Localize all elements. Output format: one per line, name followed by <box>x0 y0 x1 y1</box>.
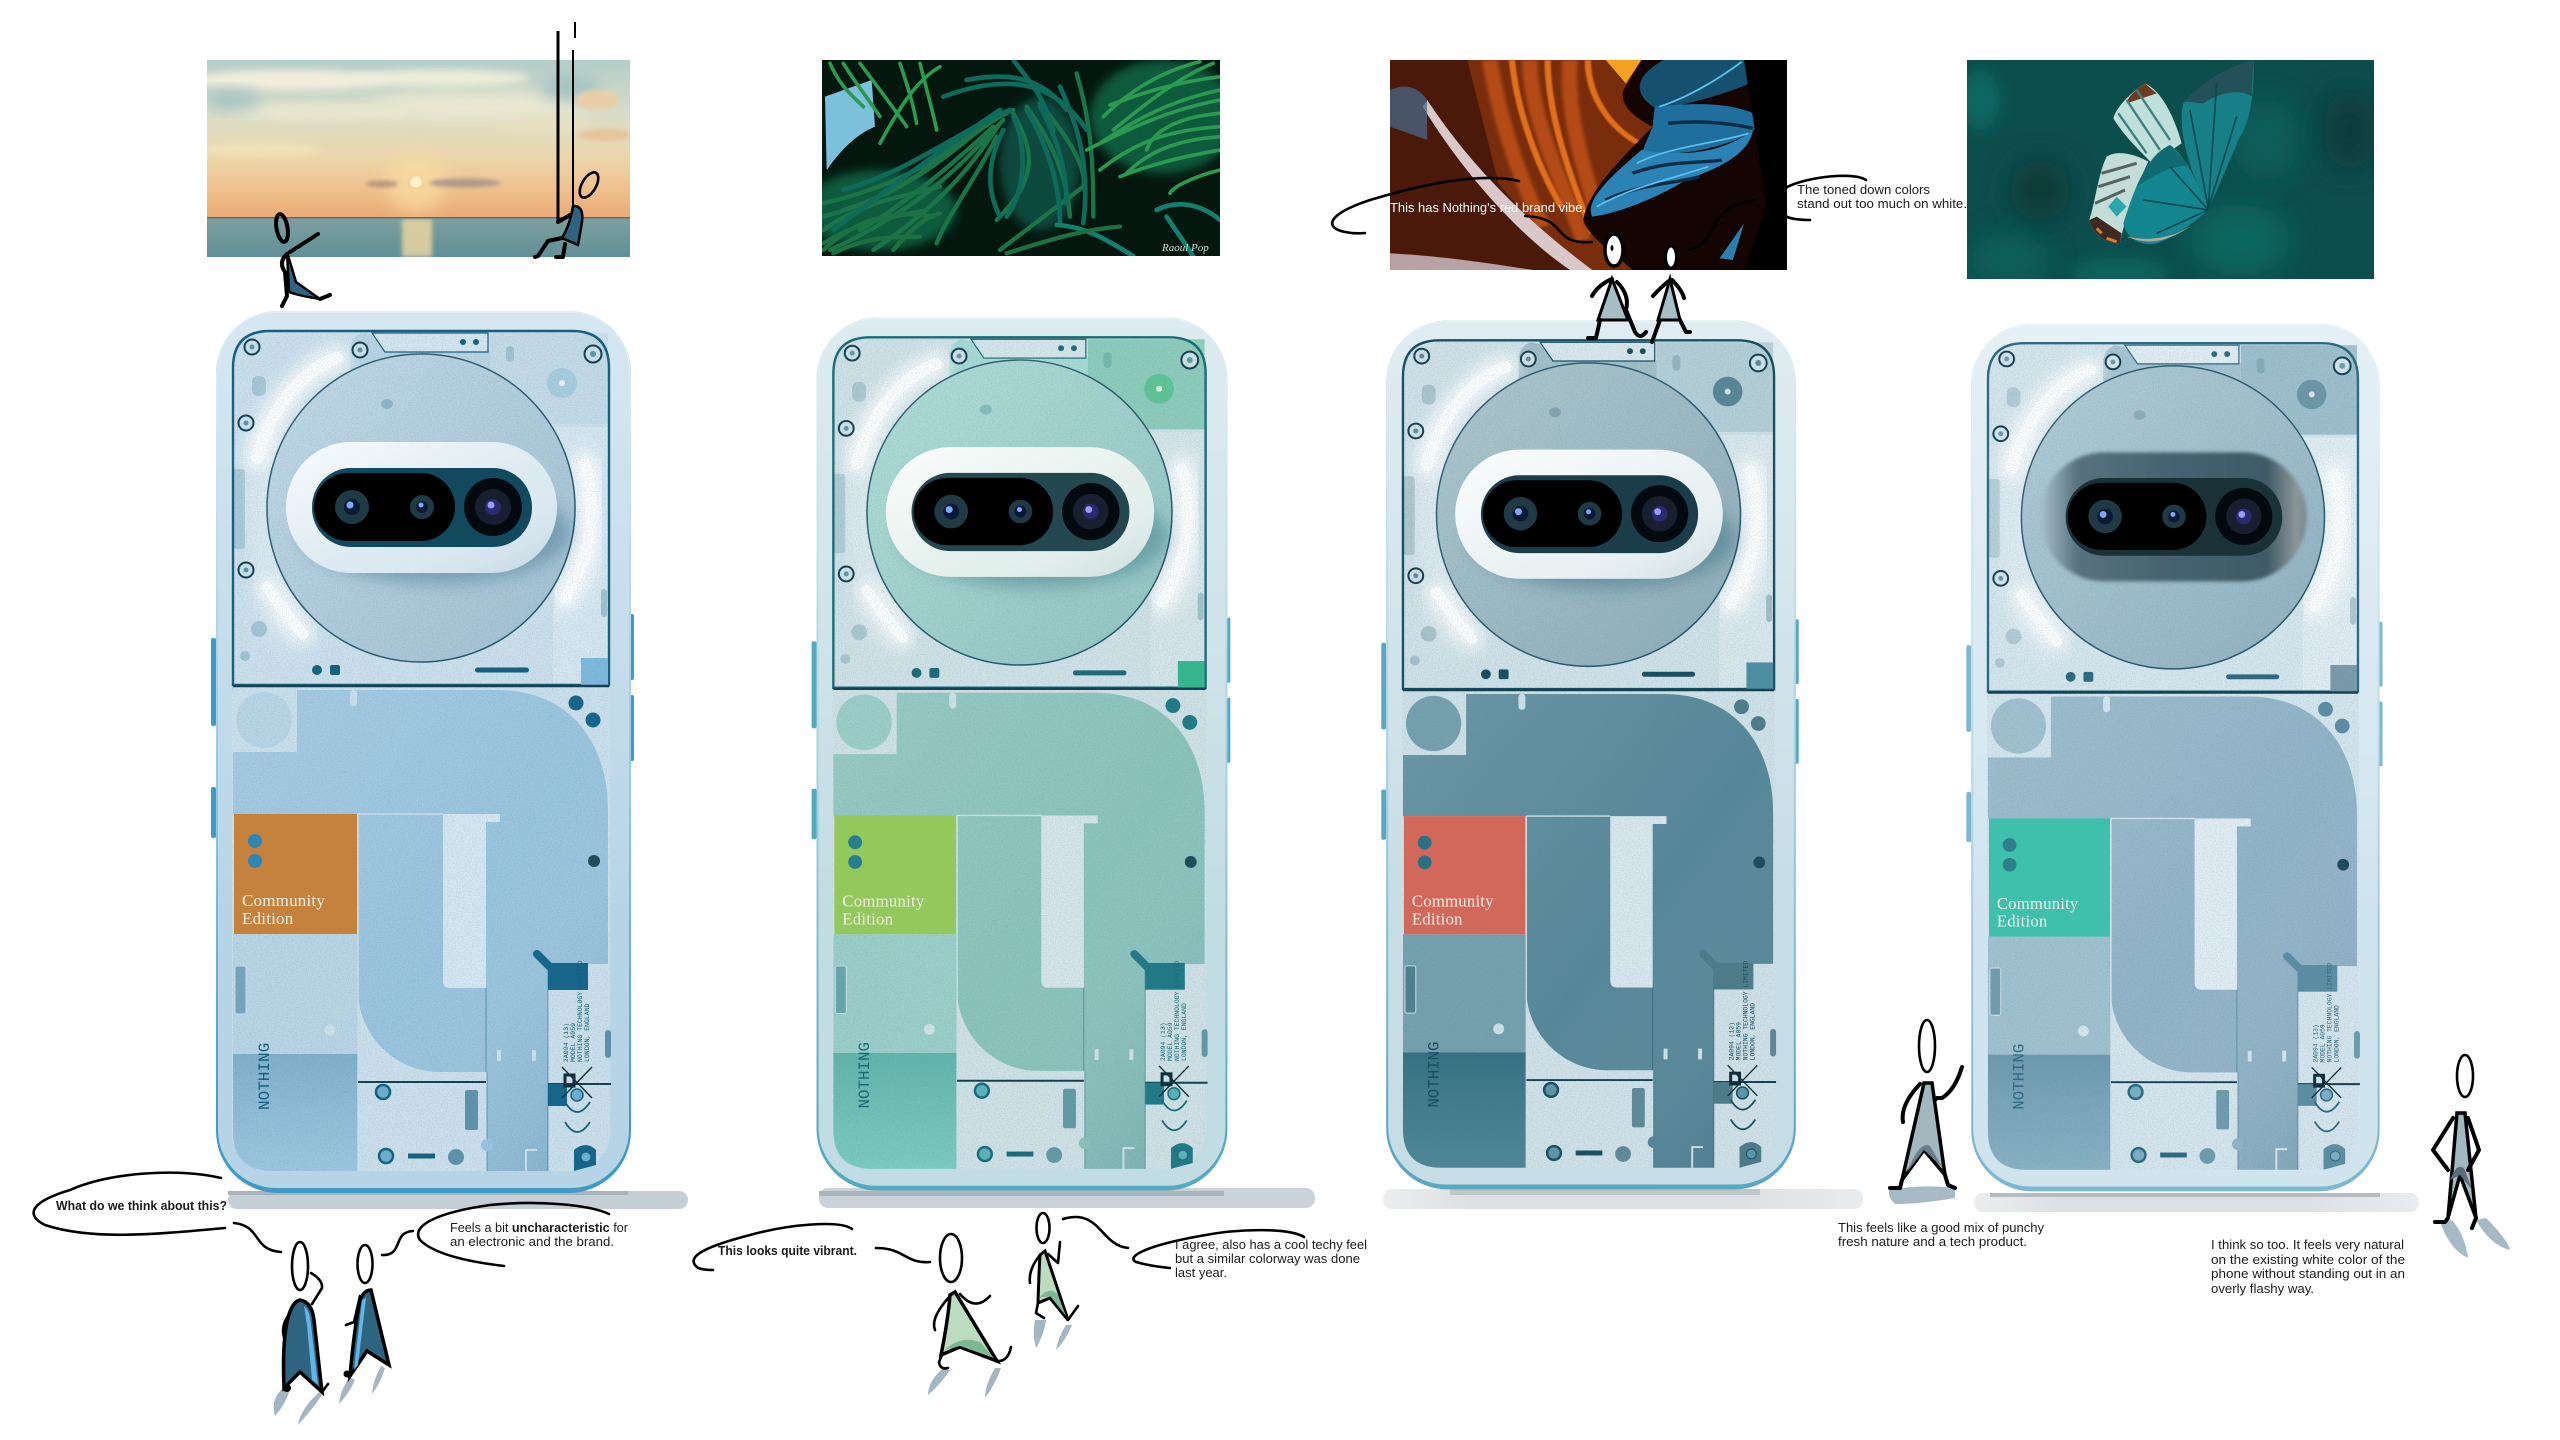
figure: waving walker <box>1889 1020 1962 1204</box>
speech bubble: cool techy: but a similar colorway was done <box>1175 1252 1360 1266</box>
speech bubble: red brand vibe: This has Nothing's red brand vibe. <box>1390 201 1586 215</box>
regulatory text: LONDON, ENGLAND <box>1749 1003 1756 1060</box>
brand wordmark: NOTHING <box>856 1042 874 1109</box>
community edition patch <box>1989 818 2110 937</box>
caption: very natural <box>2211 1238 2405 1296</box>
speech bubble: what do we think <box>34 1173 281 1252</box>
photo: red canyon <box>1390 60 1787 270</box>
community edition patch <box>834 815 956 934</box>
phone 2: green patch <box>812 317 1230 1191</box>
community edition patch: Edition <box>842 909 894 928</box>
brand wordmark: NOTHING <box>256 1043 274 1110</box>
figure: left pair, shorter <box>339 1245 389 1404</box>
regulatory text: NOTHING TECHNOLOGY LIMITED <box>2326 963 2333 1063</box>
figure: green walker, large <box>928 1234 1011 1398</box>
speech bubble: uncharacteristic: Feels a bit uncharacteristic for <box>450 1221 628 1235</box>
community edition patch: Edition <box>242 909 294 928</box>
regulatory text: MODEL A059 <box>1167 1022 1174 1061</box>
regulatory text: LONDON, ENGLAND <box>1181 1003 1188 1061</box>
community edition patch: Community <box>1412 892 1494 911</box>
speech bubble: uncharacteristic: an electronic and the brand. <box>450 1235 614 1249</box>
photo: green foliage: Raoul Pop <box>1161 242 1209 254</box>
floor shadow: phone 1 <box>228 1191 688 1209</box>
caption: punchy fresh nature <box>1838 1221 2045 1249</box>
speech bubble: toned down colors: stand out too much on white. <box>1797 197 1967 211</box>
speech bubble: uncharacteristic <box>382 1203 628 1266</box>
brand wordmark: NOTHING <box>1425 1041 1444 1108</box>
community edition patch: Edition <box>1997 912 2048 931</box>
regulatory text: 2A094 (13) <box>1160 1022 1167 1061</box>
regulatory text: 2A094 (13) <box>2313 1024 2320 1063</box>
figure: green walker, small <box>1030 1213 1078 1350</box>
phone 4: teal patch <box>1966 324 2383 1191</box>
caption: very natural: on the existing white color of the <box>2211 1253 2405 1267</box>
speech bubble: cool techy: I agree, also has a cool techy feel <box>1175 1238 1367 1252</box>
community edition patch: Edition <box>1412 909 1463 928</box>
caption: punchy fresh nature: fresh nature and a tech product. <box>1838 1235 2027 1249</box>
speech bubble: what do we think: What do we think about this? <box>56 1199 227 1213</box>
caption: very natural: phone without standing out in an <box>2211 1267 2405 1281</box>
camera module <box>286 442 571 584</box>
speech bubble: cool techy: last year. <box>1175 1266 1227 1280</box>
camera module <box>1455 450 1737 590</box>
camera module <box>886 447 1168 588</box>
regulatory text: LONDON, ENGLAND <box>2333 1005 2340 1063</box>
regulatory text: MODEL A059 <box>1736 1022 1743 1060</box>
photo: teal butterfly <box>1960 60 2376 286</box>
figure: left pair, taller <box>274 1242 328 1425</box>
figure: on rope swing <box>535 22 602 257</box>
caption: very natural: I think so too. It feels very natural <box>2211 1238 2404 1252</box>
floor shadow: phone 2 <box>819 1188 1315 1208</box>
community edition patch: Community <box>1997 894 2079 913</box>
regulatory text: NOTHING TECHNOLOGY LIMITED <box>577 960 584 1062</box>
caption: very natural: overly flashy way. <box>2211 1282 2314 1296</box>
regulatory text: MODEL A059 <box>2319 1024 2326 1063</box>
photo: green foliage <box>803 57 1237 257</box>
speech bubble: vibrant: This looks quite vibrant. <box>718 1244 857 1258</box>
figure: seated on phone, right <box>1652 246 1690 342</box>
figure: pointing at sunset <box>274 213 330 306</box>
regulatory text: NOTHING TECHNOLOGY LIMITED <box>1174 961 1181 1061</box>
speech bubble: cool techy <box>1063 1217 1367 1280</box>
regulatory text: MODEL A059 <box>570 1023 577 1062</box>
regulatory text: LONDON, ENGLAND <box>584 1003 591 1062</box>
speech bubble: toned down colors: The toned down colors <box>1797 183 1930 197</box>
speech bubble: toned down colors <box>1688 176 1967 250</box>
floor shadow: phone 3 <box>1383 1189 1863 1209</box>
figure: seated on phone, left <box>1588 234 1646 338</box>
community edition patch: Community <box>242 891 325 910</box>
community edition patch <box>234 814 357 934</box>
figure: hands on hips <box>2433 1055 2510 1258</box>
speech bubble: red brand vibe <box>1332 178 1592 242</box>
regulatory text: NOTHING TECHNOLOGY LIMITED <box>1742 961 1749 1060</box>
phone 3: red patch <box>1381 321 1799 1189</box>
regulatory text: 2A094 (13) <box>563 1023 570 1062</box>
caption: punchy fresh nature: This feels like a good mix of punchy <box>1838 1221 2045 1235</box>
brand wordmark: NOTHING <box>2010 1044 2028 1110</box>
regulatory text: 2A094 (13) <box>1729 1022 1736 1060</box>
camera module <box>2040 452 2307 581</box>
speech bubble: vibrant <box>694 1224 930 1270</box>
floor shadow: phone 4 <box>1974 1193 2419 1212</box>
community edition patch <box>1404 816 1525 934</box>
phone 1: orange patch <box>211 311 634 1193</box>
photo: sunset over sea <box>190 60 631 257</box>
community edition patch: Community <box>842 892 925 911</box>
